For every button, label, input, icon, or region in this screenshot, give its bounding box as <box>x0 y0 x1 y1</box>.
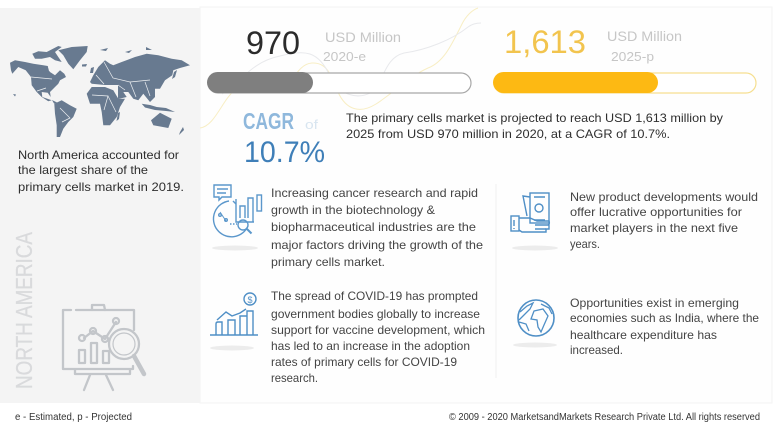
market summary text: 2025 from USD 970 million in 2020, at a CAGR of 10.7%. <box>346 127 670 141</box>
stat: 1,613 USD Million 2025-p: 1,613 <box>504 24 586 60</box>
CAGR callout: 10.7% <box>244 136 325 169</box>
text: cancer research: major factors driving the growth of the <box>271 238 483 252</box>
text: emerging economies: increased. <box>570 343 623 357</box>
stat: 970 USD Million 2020-e: 2020-e <box>323 49 366 64</box>
icon shadow <box>512 246 558 250</box>
stat: 970 USD Million 2020-e: 970 <box>246 25 300 61</box>
stat: 1,613 USD Million 2025-p: 2025-p <box>611 49 654 64</box>
stat: 1,613 USD Million 2025-p: USD Million <box>607 28 682 44</box>
CAGR callout <box>243 108 325 169</box>
CAGR callout: of <box>305 117 318 132</box>
text: cancer research: growth in the biotechnology & <box>271 203 435 217</box>
text: cancer research <box>271 186 483 269</box>
text: emerging economies: economies such as India, where the <box>570 311 759 325</box>
text: cancer research: Increasing cancer research and rapid <box>271 186 478 200</box>
opportunity block: new products <box>511 190 758 251</box>
sidebar text: North America statement: primary cells market in 2019. <box>18 180 184 194</box>
text: COVID-19 <box>271 289 485 385</box>
text: COVID-19: has led to an increase in the adoption <box>271 339 470 353</box>
text: new products: New product developments would <box>570 190 758 204</box>
market summary text <box>346 111 723 141</box>
world map <box>10 46 190 137</box>
stat: 970 USD Million 2020-e <box>246 25 401 64</box>
text: emerging economies: Opportunities exist in emerging <box>570 296 739 310</box>
stat: 1,613 USD Million 2025-p <box>504 24 682 64</box>
text: emerging economies: healthcare expenditure has <box>570 328 717 342</box>
icon: hand holding money <box>511 193 549 232</box>
icon shadow <box>513 342 557 348</box>
text: COVID-19: research. <box>271 371 318 385</box>
text: COVID-19: support for vaccine development, which <box>271 323 485 337</box>
icon: rising bars with dollar <box>210 293 258 335</box>
text: emerging economies <box>570 296 759 357</box>
icon: rising bars with dollar: $ <box>248 295 253 305</box>
text: new products: market players in the next five <box>570 221 738 235</box>
icon: analytics pie <box>213 185 262 237</box>
text: cancer research: primary cells market. <box>271 255 385 269</box>
sidebar text: North America statement: the largest share of the <box>18 163 148 177</box>
market summary text: The primary cells market is projected to reach USD 1,613 million by <box>346 111 723 125</box>
text: new products: offer lucrative opportunities for <box>570 205 742 219</box>
icon shadow <box>210 346 254 350</box>
text: new products: years. <box>570 237 600 251</box>
opportunity block: emerging economies <box>513 296 759 357</box>
text: COVID-19: government bodies globally to increase <box>271 307 480 321</box>
sidebar text: North America statement <box>18 148 184 194</box>
text: cancer research: biopharmaceutical industries are the <box>271 220 476 234</box>
sidebar text: North America statement: North America accounted for <box>18 148 179 162</box>
progress bar: 970 <box>207 72 471 93</box>
text: new products <box>570 190 758 251</box>
panel: North America sidebar <box>0 8 200 403</box>
CAGR callout: CAGR <box>243 108 294 134</box>
text: COVID-19: The spread of COVID-19 has prompted <box>271 289 478 303</box>
stat: 970 USD Million 2020-e: USD Million <box>325 29 401 45</box>
icon: globe <box>518 300 554 336</box>
icon: presentation board with magnifier <box>63 305 144 390</box>
vertical label: NORTH AMERICA: NORTH AMERICA <box>11 231 37 389</box>
icon shadow <box>212 246 258 250</box>
text: COVID-19: rates of primary cells for COVID-19 <box>271 355 457 369</box>
driver block: cancer research <box>212 185 483 269</box>
footnote: estimated and projected: e - Estimated, p - Projected <box>15 412 132 423</box>
progress bar: 1,613 <box>493 72 756 93</box>
driver block: COVID-19 <box>210 289 485 385</box>
copyright: © 2009 - 2020 MarketsandMarkets Research Private Ltd. All rights reserved <box>449 412 760 423</box>
